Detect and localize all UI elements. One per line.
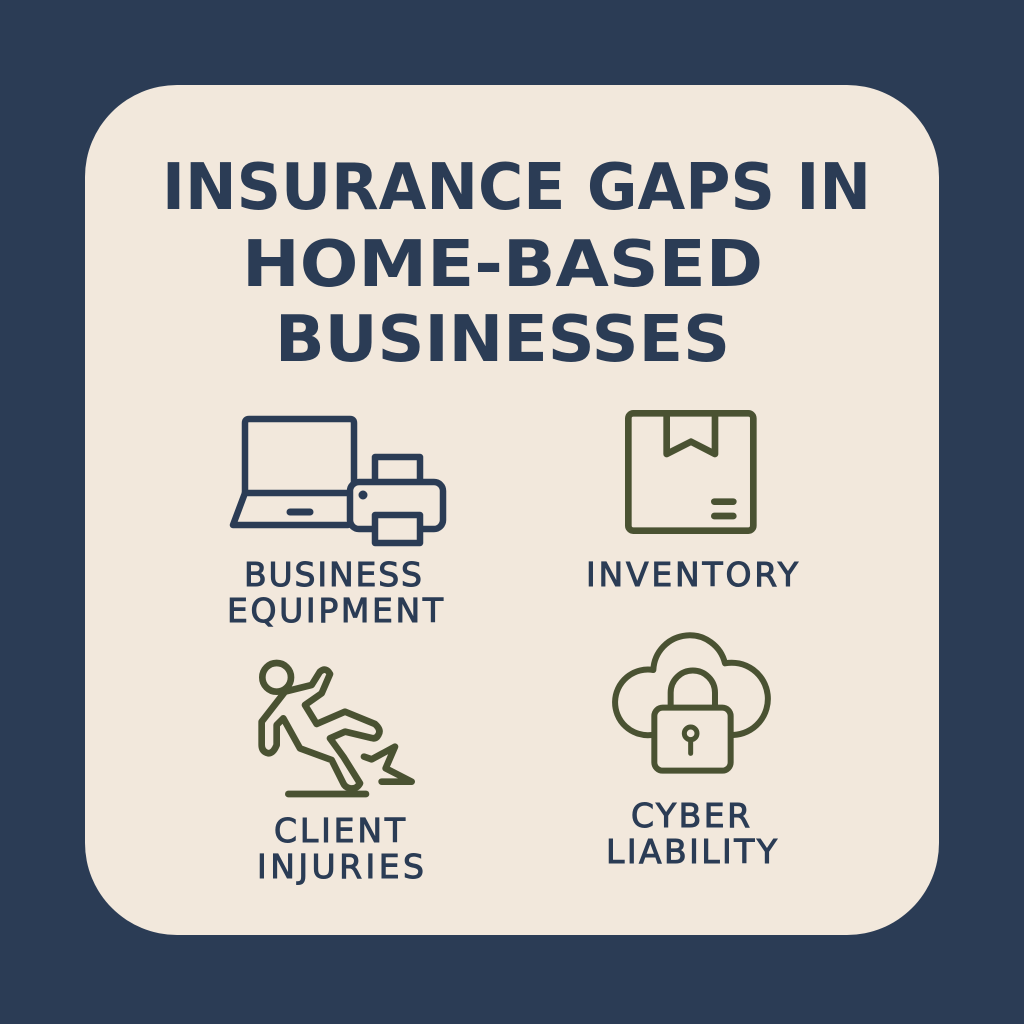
cream panel	[85, 85, 939, 935]
title	[162, 150, 871, 377]
label: inventory: INVENTORY	[586, 555, 799, 594]
label: client injuries: INJURIES	[257, 847, 424, 886]
label: business equipment	[227, 555, 444, 630]
title: HOME-BASED	[242, 227, 763, 302]
title: INSURANCE GAPS IN	[162, 150, 871, 225]
label: cyber liability: CYBER	[631, 796, 750, 835]
label: business equipment: EQUIPMENT	[227, 591, 444, 630]
label: cyber liability: LIABILITY	[606, 832, 778, 871]
label: business equipment: BUSINESS	[244, 555, 422, 594]
icon: person slipping	[262, 663, 412, 794]
icon: inventory box	[628, 413, 753, 531]
icon: laptop and printer	[233, 419, 443, 543]
title: BUSINESSES	[275, 302, 730, 377]
label: client injuries: CLIENT	[274, 811, 406, 850]
label: cyber liability	[606, 796, 778, 871]
label: client injuries	[257, 811, 424, 886]
icon: cloud with padlock	[615, 635, 768, 771]
